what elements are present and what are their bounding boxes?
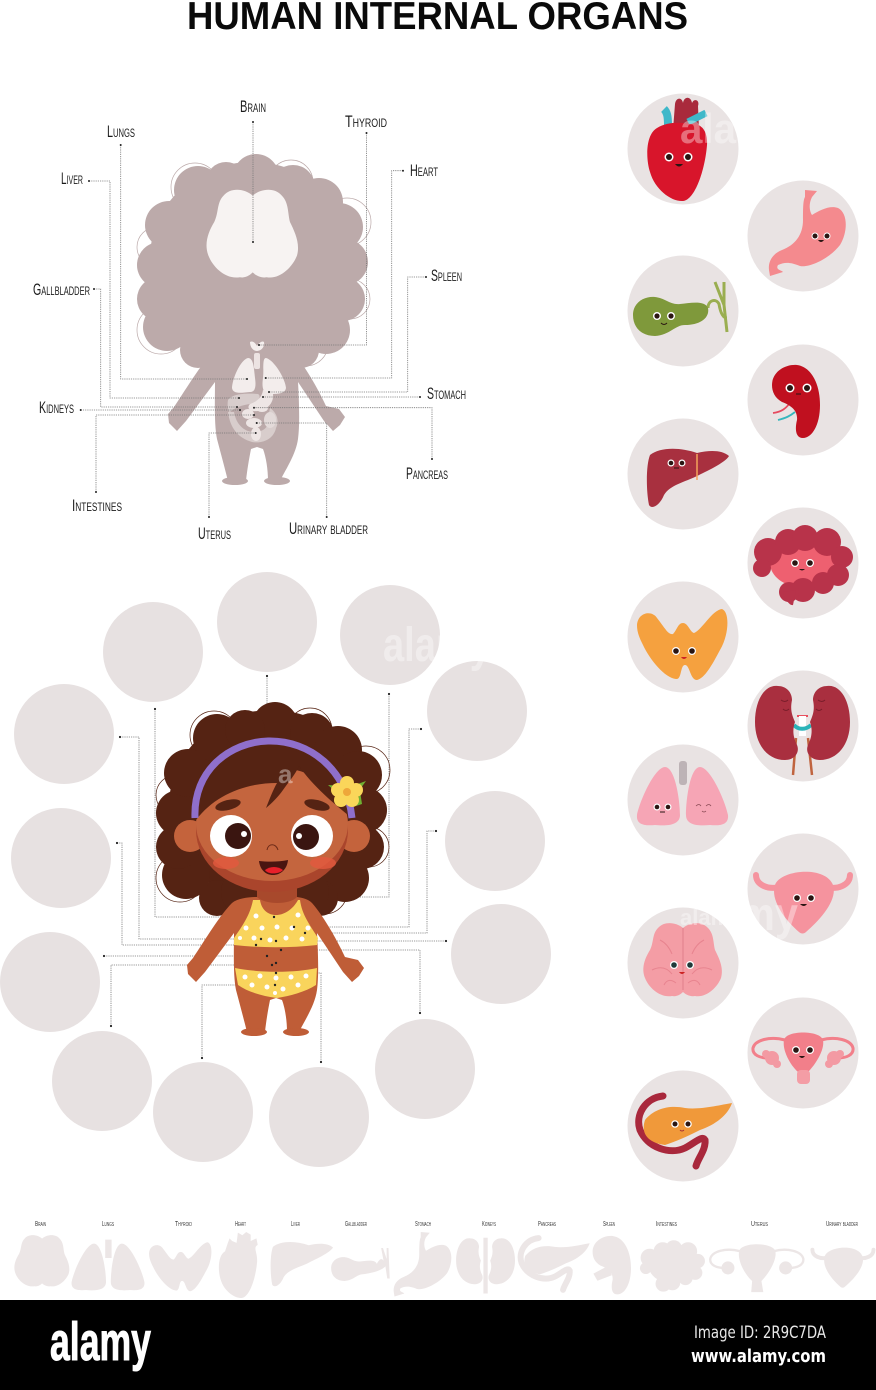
legend labels: Uterus xyxy=(751,1221,769,1228)
silhouette: liver xyxy=(271,1242,333,1286)
organ: urinary bladder xyxy=(738,872,850,940)
face xyxy=(196,768,348,892)
organ: heart: ala xyxy=(680,105,737,152)
organ labels: Kidneys xyxy=(39,398,74,417)
organ labels: Lungs xyxy=(107,122,135,141)
organ: lungs xyxy=(637,761,728,825)
organ labels: Pancreas xyxy=(406,464,448,483)
headband xyxy=(195,741,352,818)
legend labels xyxy=(35,1221,858,1228)
legend labels: Liver xyxy=(291,1221,300,1228)
organ: uterus xyxy=(753,1032,853,1084)
silhouette: urinary bladder xyxy=(812,1248,874,1288)
organ labels: Brain xyxy=(240,97,266,116)
leader lines xyxy=(81,122,432,517)
organ: kidneys xyxy=(755,686,850,775)
legend labels: Urinary bladder xyxy=(826,1221,858,1228)
organ labels: Thyroid xyxy=(345,112,387,131)
silhouette: pancreas xyxy=(521,1238,590,1290)
legend labels: Lungs xyxy=(102,1221,114,1228)
eyebrows xyxy=(214,797,331,813)
hair back xyxy=(156,702,387,916)
organ: brain xyxy=(643,905,743,996)
swimsuit top xyxy=(234,900,318,947)
hair outline arcs xyxy=(156,708,390,914)
brain area in silhouette xyxy=(207,190,298,278)
organ: spleen xyxy=(772,365,820,438)
organ labels: Heart xyxy=(410,161,438,180)
legend labels: Heart xyxy=(235,1221,246,1228)
organ: liver xyxy=(647,449,729,507)
cheeks xyxy=(213,857,336,869)
nose xyxy=(267,845,278,850)
organ: thyroid xyxy=(637,609,727,680)
organ: gallbladder xyxy=(633,282,727,336)
body xyxy=(187,888,364,1036)
illustration: girl character xyxy=(156,702,390,1036)
silhouette: heart xyxy=(219,1232,258,1298)
silhouette: spleen xyxy=(593,1236,631,1294)
face highlight xyxy=(196,767,348,881)
organ labels: Stomach xyxy=(427,384,466,403)
silhouette: uterus xyxy=(710,1244,803,1292)
organ labels: Urinary bladder xyxy=(289,519,368,538)
flower xyxy=(328,776,366,807)
organ: heart xyxy=(647,98,737,201)
organ: brain: alamy xyxy=(680,905,743,930)
legend labels: Pancreas xyxy=(538,1221,556,1228)
footer logo: alamy xyxy=(50,1312,151,1372)
footer url: www.alamy.com xyxy=(691,1346,826,1367)
watermark: a xyxy=(278,759,293,789)
organ labels: Liver xyxy=(61,169,83,188)
silhouette: brain xyxy=(14,1235,69,1286)
organ circles xyxy=(628,94,858,1182)
silhouette: thyroid xyxy=(149,1242,211,1291)
organ: urinary bladder: my xyxy=(738,888,798,940)
panel: organ character circles xyxy=(628,94,858,1182)
organ labels: Gallbladder xyxy=(33,280,90,299)
organ labels xyxy=(33,97,466,543)
legend labels: Intestines xyxy=(656,1221,677,1228)
silhouette: stomach xyxy=(394,1232,451,1296)
silhouette: intestines xyxy=(640,1240,705,1292)
internal organs in silhouette xyxy=(228,341,286,442)
legend labels: Gallbladder xyxy=(345,1221,367,1228)
legend labels: Thyroid xyxy=(175,1221,192,1228)
legend labels: Brain xyxy=(35,1221,46,1228)
legend labels: Kidneys xyxy=(482,1221,496,1228)
legend labels: Spleen xyxy=(603,1221,615,1228)
silhouette: lungs xyxy=(72,1240,144,1290)
organ labels: Spleen xyxy=(431,266,462,285)
swimsuit bottom xyxy=(235,968,317,998)
footer: black stock-photo bar xyxy=(0,1300,876,1390)
fringe xyxy=(196,740,352,820)
mouth xyxy=(259,860,288,875)
leader end dots xyxy=(103,675,447,1063)
organ: stomach xyxy=(769,190,846,276)
panel: blank label circles xyxy=(0,572,551,1167)
silhouette: kidneys xyxy=(456,1238,515,1294)
silhouette hair xyxy=(137,154,368,368)
panel: labelled silhouette diagram xyxy=(33,97,466,543)
ears xyxy=(174,820,370,852)
footer image id: Image ID: 2R9C7DA xyxy=(694,1323,826,1343)
torso dots xyxy=(255,916,306,986)
silhouette icons xyxy=(14,1232,873,1298)
organ labels: Uterus xyxy=(198,524,231,543)
leader dots xyxy=(80,121,433,518)
panel: organ silhouettes legend xyxy=(14,1221,873,1298)
organ: intestines xyxy=(753,525,853,605)
hair outline arcs xyxy=(137,160,371,366)
silhouette body xyxy=(168,337,345,485)
legend labels: Stomach xyxy=(415,1221,431,1228)
watermark: alamy xyxy=(383,619,491,672)
leader lines: girl figure xyxy=(104,676,446,1062)
organ labels: Intestines xyxy=(72,496,122,515)
eyes xyxy=(210,815,333,857)
neck shadow xyxy=(257,888,297,903)
silhouette: gallbladder xyxy=(331,1248,390,1281)
organ: pancreas xyxy=(639,1096,732,1166)
